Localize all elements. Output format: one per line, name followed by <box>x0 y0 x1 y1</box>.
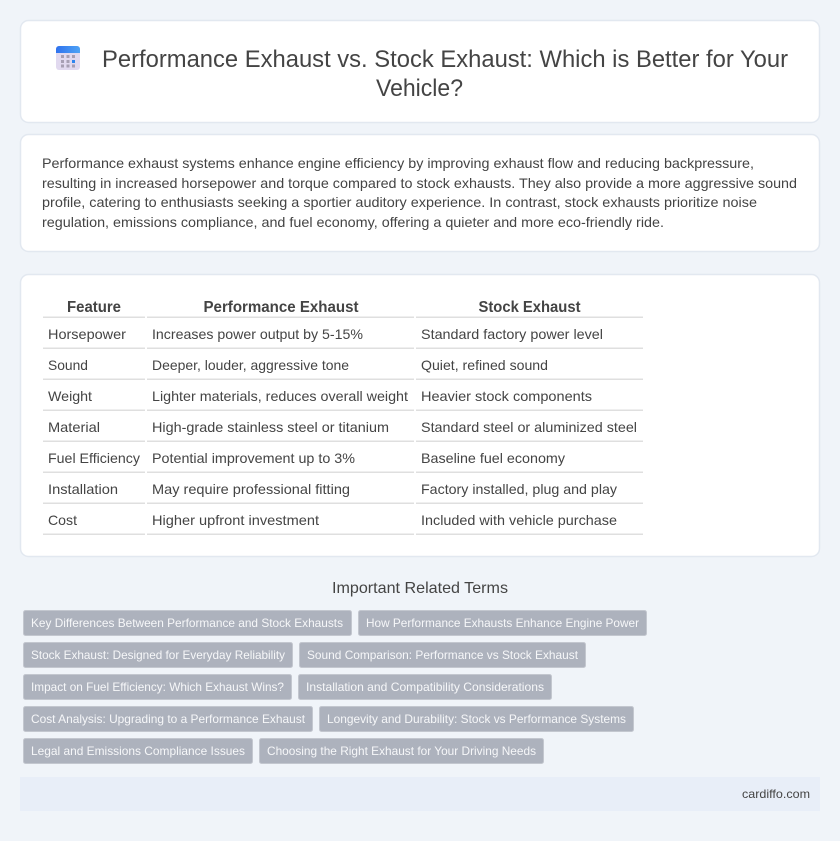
footer <box>20 777 820 811</box>
tag: Key Differences Between Performance and Stock Exhausts <box>31 616 343 630</box>
row: installation <box>43 481 643 504</box>
row: cost: Higher upfront investment <box>152 512 319 528</box>
table header: Stock Exhaust <box>478 299 581 316</box>
row: weight: Lighter materials, reduces overall weight <box>152 388 408 404</box>
panel: comparison table <box>20 274 820 556</box>
tag <box>298 674 552 700</box>
tag <box>24 610 352 636</box>
row: weight <box>43 388 643 411</box>
row: material: Standard steel or aluminized steel <box>421 419 637 435</box>
title: Vehicle? <box>376 75 463 102</box>
panel: related term tags <box>24 610 646 764</box>
row: sound <box>43 357 643 380</box>
intro paragraph: profile, catering to enthusiasts seeking a sportier auditory experience. In contrast, stock exhausts prioritize noise <box>42 194 757 210</box>
row: material <box>43 419 643 442</box>
intro paragraph <box>42 155 797 230</box>
table header <box>43 299 643 318</box>
row: installation: May require professional fitting <box>152 481 350 497</box>
row: cost: Included with vehicle purchase <box>421 512 617 528</box>
tag <box>260 738 544 764</box>
tag <box>24 674 292 700</box>
footer: cardiffo.com <box>742 787 810 801</box>
row: installation: Installation <box>48 481 118 497</box>
tag: Stock Exhaust: Designed for Everyday Reliability <box>31 648 285 662</box>
row: material: Material <box>48 419 100 435</box>
row: weight: Heavier stock components <box>421 388 592 404</box>
row: horsepower: Standard factory power level <box>421 326 603 342</box>
row: horsepower <box>43 326 643 349</box>
tag <box>358 610 646 636</box>
row: fuel efficiency: Fuel Efficiency <box>48 450 140 466</box>
tag <box>320 706 634 732</box>
intro paragraph: Performance exhaust systems enhance engine efficiency by improving exhaust flow and reducing backpressure, <box>42 155 754 171</box>
tag: Sound Comparison: Performance vs Stock Exhaust <box>307 648 579 662</box>
tag <box>300 642 586 668</box>
table header: Feature <box>67 299 121 316</box>
tag: Impact on Fuel Efficiency: Which Exhaust Wins? <box>31 680 284 694</box>
tag: How Performance Exhausts Enhance Engine Power <box>366 616 639 630</box>
row: material: High-grade stainless steel or titanium <box>152 419 389 435</box>
row: sound: Deeper, louder, aggressive tone <box>152 357 349 373</box>
tag: Legal and Emissions Compliance Issues <box>31 744 245 758</box>
tag: Choosing the Right Exhaust for Your Driving Needs <box>267 744 536 758</box>
row: weight: Weight <box>48 388 92 404</box>
row: fuel efficiency: Potential improvement up to 3% <box>152 450 355 466</box>
title <box>102 46 788 102</box>
row: sound: Quiet, refined sound <box>421 357 548 373</box>
row: horsepower: Increases power output by 5-15% <box>152 326 363 342</box>
row: fuel efficiency: Baseline fuel economy <box>421 450 565 466</box>
tag: Installation and Compatibility Considerations <box>306 680 544 694</box>
row: cost <box>43 512 643 535</box>
tag: Longevity and Durability: Stock vs Performance Systems <box>327 712 626 726</box>
row: fuel efficiency <box>43 450 643 473</box>
intro paragraph: resulting in increased horsepower and torque compared to stock exhausts. They also provide a more aggressive sound <box>42 175 797 191</box>
row: horsepower: Horsepower <box>48 326 126 342</box>
row: cost: Cost <box>48 512 77 528</box>
tag <box>24 642 292 668</box>
title: Performance Exhaust vs. Stock Exhaust: Which is Better for Your <box>102 46 788 73</box>
heading: related terms: Important Related Terms <box>332 580 508 597</box>
row: sound: Sound <box>48 357 88 373</box>
table header: Performance Exhaust <box>204 299 359 316</box>
panel: title card <box>20 20 820 122</box>
tag: Cost Analysis: Upgrading to a Performance Exhaust <box>31 712 306 726</box>
row: installation: Factory installed, plug and play <box>421 481 617 497</box>
tag <box>24 706 312 732</box>
panel: intro text <box>20 134 820 252</box>
intro paragraph: regulation, emissions compliance, and fuel economy, offering a quieter and more eco-friendly ride. <box>42 214 664 230</box>
icon: calendar grid <box>56 46 80 70</box>
tag <box>24 738 252 764</box>
